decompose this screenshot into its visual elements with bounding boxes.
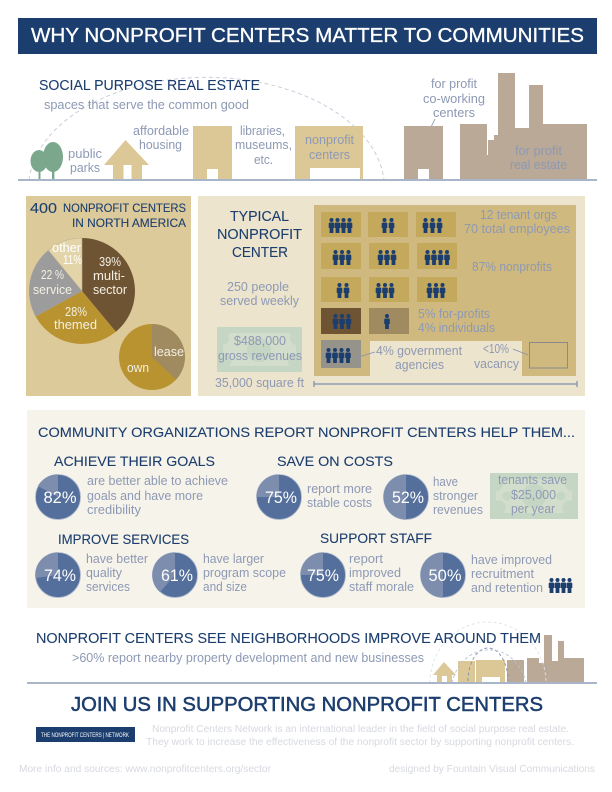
- section: improve services: [35, 531, 286, 598]
- heading: 400 nonprofit centers in north america: 400: [30, 200, 57, 217]
- rooms row 4: for-profits and individuals: [321, 308, 409, 334]
- section: achieve their goals: goals and have more: [87, 489, 203, 503]
- stat: 61% program scope: [152, 552, 286, 598]
- icon: nonprofit center building: [295, 126, 363, 180]
- heading: typical nonprofit center: NONPROFIT: [217, 226, 302, 243]
- text: property development: >60% report nearby property development and new businesses: [72, 651, 424, 665]
- chart: center types pie: 28%: [65, 305, 87, 319]
- label: libraries, museums, etc.: [235, 124, 292, 167]
- section: achieve their goals: 82%: [44, 488, 76, 507]
- section: achieve their goals: [36, 453, 228, 520]
- text: for-profits and individuals: 4% individuals: [418, 321, 495, 335]
- text: vacancy: vacancy: [474, 357, 520, 371]
- icon: dollar bill tenants save: $25,000: [511, 488, 556, 502]
- stat: 52% stronger revenues: [384, 474, 483, 520]
- stat: 52% stronger revenues: 52%: [392, 488, 424, 507]
- stat: 74% quality services: services: [86, 580, 130, 594]
- stat: 52% stronger revenues: revenues: [433, 503, 483, 517]
- heading: 400 nonprofit centers in north america: IN NORTH AMERICA: [72, 216, 186, 230]
- chart: center types pie: 11%: [63, 253, 82, 267]
- icon: vacant room: [530, 342, 568, 368]
- text: vacancy: [474, 342, 528, 371]
- heading: typical nonprofit center: TYPICAL: [230, 208, 289, 225]
- panel: typical nonprofit center: [198, 196, 585, 396]
- text: vacancy: <10%: [483, 342, 509, 356]
- text: for-profits and individuals: 5% for-profits: [418, 307, 490, 321]
- icon: dollar bill gross revenues: gross revenues: [218, 349, 302, 363]
- chart: own vs lease pie: lease: [154, 345, 184, 359]
- panel: neighborhoods improve: [27, 622, 597, 684]
- panel: 400 nonprofit centers: [26, 196, 191, 396]
- icon: dollar bill tenants save: [490, 473, 578, 519]
- text: tenants and employees: 70 total employees: [464, 222, 570, 236]
- stat: 52% stronger revenues: have: [433, 475, 458, 489]
- label: affordable housing: housing: [139, 138, 182, 152]
- stat: 75% staff morale: staff morale: [349, 580, 414, 594]
- section: achieve their goals: are better able to achieve: [87, 474, 228, 488]
- heading: typical nonprofit center: CENTER: [232, 244, 288, 261]
- icon: for profit real estate skyline: for profit: [515, 144, 563, 158]
- stat: 75% stable costs: report more: [307, 482, 372, 496]
- title banner: WHY NONPROFIT CENTERS MATTER TO COMMUNITIES: [31, 25, 584, 47]
- icon: dollar bill gross revenues: $488,000: [234, 334, 286, 348]
- label: affordable housing: affordable: [133, 124, 189, 138]
- stat: 61% program scope: have larger: [203, 552, 264, 566]
- chart: center types pie: multi-: [93, 269, 125, 283]
- icon: nonprofit center building: centers: [309, 148, 350, 162]
- heading: community organizations report: COMMUNITY ORGANIZATIONS REPORT NONPROFIT CENTERS HELP THEM...: [38, 424, 575, 440]
- label: libraries, museums, etc.: etc.: [254, 153, 273, 167]
- stat: 50% recruitment and retention: recruitment: [471, 567, 535, 581]
- rooms row 3: [321, 277, 457, 302]
- rooms row 2: [321, 243, 457, 269]
- chart: own vs lease pie: own: [127, 361, 149, 375]
- chart: center types pie: other: [52, 241, 81, 255]
- stat: 50% recruitment and retention: have improved: [471, 553, 552, 567]
- panel: community organizations report: [27, 410, 585, 608]
- section: support staff: [300, 530, 572, 598]
- icon: staff people: [549, 578, 572, 593]
- chart: center types pie: [29, 238, 135, 344]
- subheading: spaces that serve the common good: [44, 98, 249, 112]
- footer: designer credit: designed by Fountain Visual Communications: [389, 764, 595, 775]
- stat: 75% staff morale: report: [349, 552, 384, 566]
- title banner: [18, 18, 597, 54]
- text: about the network: Nonprofit Centers Network is an international leader in the field of social purpose real estate.: [152, 724, 569, 735]
- chart: center types pie: sector: [93, 283, 127, 297]
- heading: neighborhoods improve: NONPROFIT CENTERS SEE NEIGHBORHOODS IMPROVE AROUND THEM: [36, 631, 541, 647]
- label: for profit co-working centers: co-working: [423, 92, 485, 106]
- text: tenants and employees: [464, 208, 570, 236]
- stat: 75% staff morale: [300, 552, 414, 598]
- stat: 74% quality services: quality: [86, 566, 123, 580]
- footer: sources: More info and sources: www.nonprofitcenters.org/sector: [19, 764, 272, 775]
- room row 5: government agencies: [321, 340, 361, 368]
- stat: 75% staff morale: improved: [349, 566, 401, 580]
- icon: dollar bill tenants save: tenants save: [498, 473, 567, 487]
- icon: library building: [193, 126, 232, 180]
- stat: 61% program scope: 61%: [161, 566, 193, 585]
- section: achieve their goals: ACHIEVE THEIR GOALS: [54, 453, 215, 469]
- section: improve services: IMPROVE SERVICES: [58, 531, 189, 547]
- stat: 61% program scope: and size: [203, 580, 247, 594]
- heading: social purpose real estate: SOCIAL PURPOSE REAL ESTATE: [39, 77, 260, 94]
- stat: 75% stable costs: 75%: [265, 488, 297, 507]
- section: save on costs: SAVE ON COSTS: [277, 453, 393, 469]
- label: public parks: public: [68, 147, 102, 161]
- text: 87% nonprofits: 87% nonprofits: [472, 260, 552, 274]
- stat: 50% recruitment and retention: and retention: [471, 581, 543, 595]
- floor plan: [314, 205, 576, 376]
- section: support staff: SUPPORT STAFF: [320, 530, 432, 546]
- label: affordable housing: [133, 124, 189, 152]
- heading: 400 nonprofit centers in north america: [30, 200, 186, 230]
- icon: house: [104, 140, 149, 180]
- label: for profit co-working centers: [423, 77, 485, 133]
- stat: 75% stable costs: stable costs: [307, 496, 372, 510]
- chart: center types pie: themed: [54, 318, 97, 332]
- text: government agencies: 4% government: [376, 344, 463, 358]
- stat: 50% recruitment and retention: 50%: [428, 566, 462, 585]
- stat: 75% staff morale: 75%: [307, 566, 339, 585]
- label: public parks: [68, 147, 102, 175]
- logo: nonprofit centers network: [36, 727, 135, 742]
- chart: own vs lease pie: [119, 324, 185, 390]
- icon: neighborhood skyline: [430, 622, 584, 683]
- stat: 74% quality services: [35, 552, 148, 598]
- heading: typical nonprofit center: [217, 208, 302, 261]
- text: tenants and employees: 12 tenant orgs: [480, 208, 557, 222]
- label: for profit co-working centers: centers: [433, 106, 475, 120]
- label: public parks: parks: [70, 161, 100, 175]
- stat: 75% stable costs: [256, 474, 372, 520]
- stat: 61% program scope: program scope: [203, 566, 286, 580]
- text: people served: served weekly: [220, 294, 300, 308]
- text: about the network: They work to increase the effectiveness of the nonprofit sector by supporting nonprofit centers.: [146, 737, 574, 748]
- text: government agencies: [355, 344, 463, 372]
- icon: dollar bill gross revenues: [217, 327, 302, 372]
- label: libraries, museums, etc.: museums,: [235, 138, 292, 152]
- icon: co-working building: [404, 126, 443, 180]
- heading: join us: JOIN US IN SUPPORTING NONPROFIT CENTERS: [71, 694, 543, 716]
- icon: nonprofit center building: nonprofit: [305, 133, 355, 147]
- chart: center types pie: service: [33, 283, 72, 297]
- stat: 74% quality services: 74%: [44, 566, 76, 585]
- scale: 35,000 square ft: 35,000 square ft: [215, 376, 305, 390]
- icon: dollar bill tenants save: per year: [511, 502, 555, 516]
- section: achieve their goals: credibility: [87, 503, 142, 517]
- text: government agencies: agencies: [395, 358, 444, 372]
- stat: 52% stronger revenues: stronger: [433, 489, 478, 503]
- stat: 50% recruitment and retention: [420, 552, 552, 598]
- text: about the network: [146, 724, 574, 748]
- chart: center types pie: 22 %: [41, 268, 64, 282]
- icon: for profit real estate skyline: real estate: [510, 158, 567, 172]
- label: libraries, museums, etc.: libraries,: [240, 124, 285, 138]
- section: save on costs: [256, 453, 578, 520]
- scale: 35,000 square ft: [215, 376, 577, 390]
- label: for profit co-working centers: for profit: [431, 77, 478, 91]
- panel: social purpose real estate scene: [18, 73, 597, 181]
- stat: 74% quality services: have better: [86, 552, 148, 566]
- chart: center types pie: 39%: [99, 255, 121, 269]
- heading: 400 nonprofit centers in north america: NONPROFIT CENTERS: [63, 201, 186, 215]
- text: people served: 250 people: [227, 280, 289, 294]
- text: for-profits and individuals: [418, 307, 495, 335]
- logo: nonprofit centers network: THE NONPROFIT CENTERS | NETWORK: [41, 733, 129, 739]
- rooms row 1: [321, 212, 456, 237]
- icon: for profit real estate skyline: [460, 73, 587, 180]
- icon: trees: [30, 142, 63, 180]
- text: people served: [220, 280, 300, 308]
